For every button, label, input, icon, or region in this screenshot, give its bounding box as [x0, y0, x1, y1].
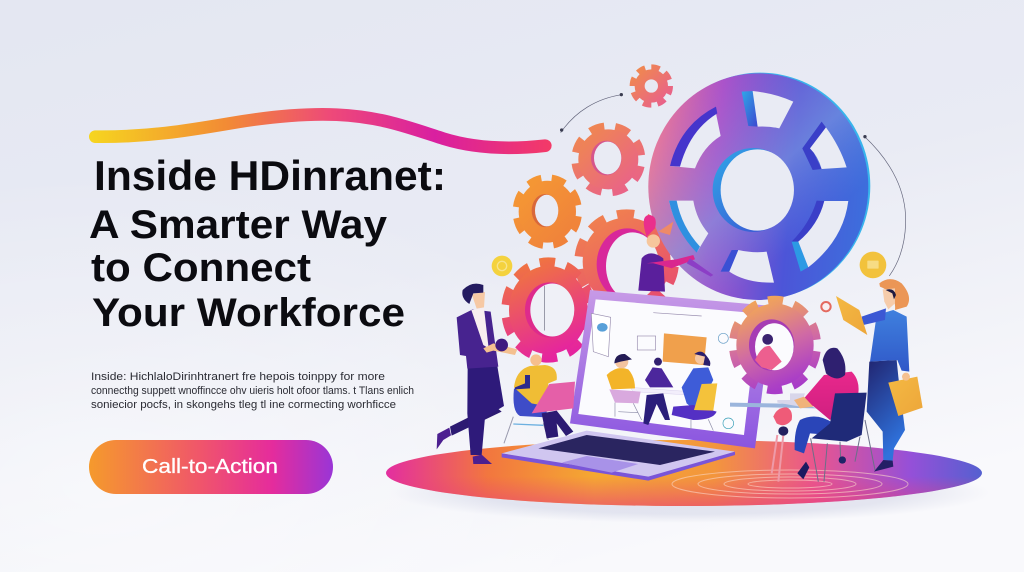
wheel windows: [669, 91, 848, 283]
screen: orange panel: [663, 333, 707, 365]
man: back leg and shoe: [450, 405, 502, 436]
man: hand and device: [483, 343, 517, 355]
icon: yellow badge left: [492, 256, 512, 276]
large wheel: [648, 73, 870, 300]
gear: medium orange: [513, 174, 582, 249]
man: shirt: [471, 308, 489, 348]
gear: behind worker: [575, 210, 678, 313]
person reaching to wheel: [638, 215, 713, 292]
woman: arm and tablet: [862, 308, 886, 325]
platform disc: [386, 440, 990, 523]
chair back: [812, 393, 867, 442]
title: A Smarter Way: [89, 203, 388, 247]
disc contour lines: [672, 470, 908, 498]
small laptop and hand: [777, 393, 805, 407]
man: front leg and shoe: [467, 366, 504, 455]
left illustration: [437, 258, 773, 481]
title: to Connect: [91, 246, 311, 290]
man: head and hair: [472, 292, 485, 309]
seated figure with laptop: [504, 354, 575, 443]
title: Your Workforce: [92, 291, 405, 335]
screen: meeting table: [630, 387, 690, 395]
man: jacket: [457, 309, 498, 369]
wheel centre hole: [713, 148, 794, 232]
upper illustration: gears and wheel: [492, 69, 906, 313]
keyboard: [538, 435, 715, 465]
chair and legs: [811, 420, 875, 482]
body text: soniecior pocfs, in skongehs tleg tl ine cormecting worhficce: [91, 399, 396, 411]
call-to-action button: [89, 440, 333, 494]
laptop screen: [570, 290, 773, 448]
gear: medium pink: [570, 121, 647, 198]
side table: [730, 403, 817, 408]
seated woman: [777, 348, 867, 479]
body text: [91, 371, 414, 411]
screen: right figure: [672, 352, 717, 431]
icon: yellow badge right: [860, 252, 886, 278]
woman: legs: [867, 360, 905, 461]
seated woman: hair: [823, 348, 845, 378]
gear: large magenta: [502, 258, 594, 362]
stool: [772, 407, 792, 482]
seated woman: top: [803, 372, 859, 420]
figure inside gear: [755, 334, 782, 370]
man standing: [437, 284, 517, 464]
gear: right: [728, 295, 822, 395]
title: Inside HDinranet:: [94, 152, 446, 199]
arrow: arc to small gear: [560, 93, 623, 133]
call-to-action button: Call-to-Action: [142, 456, 278, 478]
seated woman: legs: [795, 417, 833, 453]
trackpad: [562, 456, 638, 473]
woman: hair and head: [879, 279, 909, 310]
body text: connecthg suppett wnoffincce ohv uieris holt ofoor tlams. t Tlans enlich: [91, 385, 414, 397]
woman: shopping bag: [888, 377, 923, 416]
title: [89, 152, 446, 335]
gear: small top: [634, 69, 669, 103]
arrow: arc beside wheel: [863, 135, 906, 276]
body text: Inside: HichlaloDirinhtranert fre hepois toinppy for more: [91, 371, 385, 383]
standing woman: [836, 279, 923, 472]
decorative swoosh: [95, 114, 545, 148]
right illustration: [728, 279, 923, 482]
laptop base: [502, 431, 735, 481]
screen: left figure: [607, 354, 642, 420]
screen: middle figure: [643, 358, 673, 425]
screen: ui cards: [591, 313, 734, 429]
screen: blue chip: [597, 323, 608, 332]
icon: red ring: [821, 302, 831, 311]
woman: torso: [870, 310, 909, 372]
